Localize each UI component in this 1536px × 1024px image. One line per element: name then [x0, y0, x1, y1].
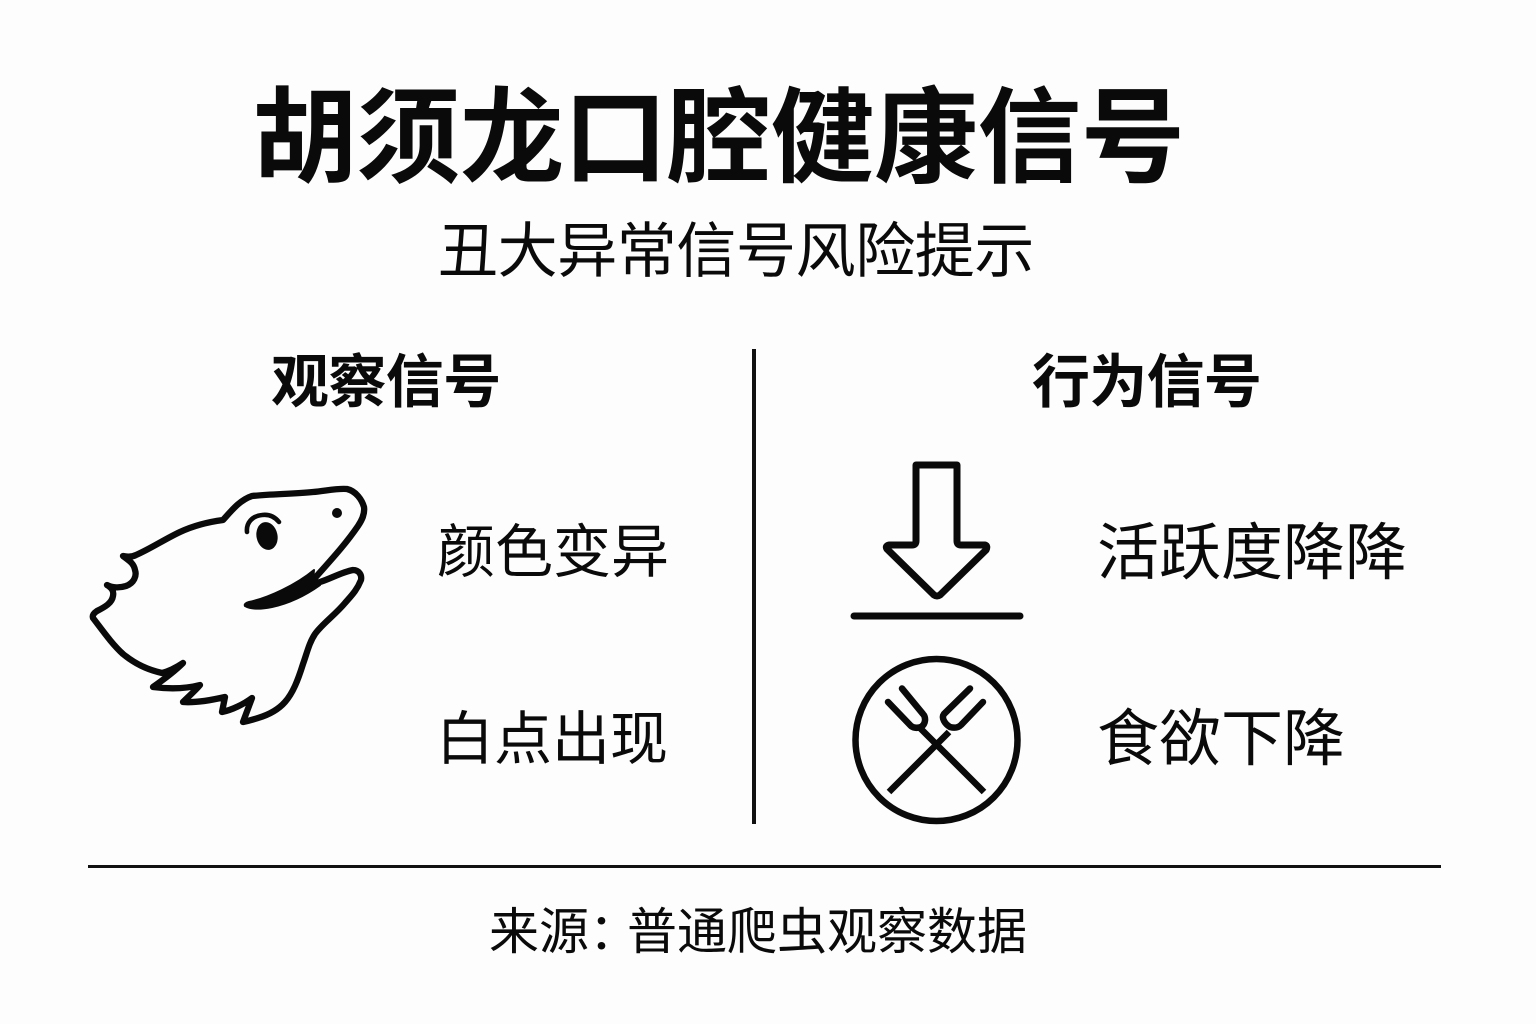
brow — [247, 515, 279, 532]
column divider — [752, 349, 756, 824]
mouth — [245, 570, 320, 609]
title: 胡须龙口腔健康信号 — [253, 81, 1185, 197]
icon: bearded dragon head — [93, 489, 364, 722]
label: activity drop: 活跃度降降 — [1097, 519, 1407, 588]
heading: observation signals: 观察信号 — [271, 350, 501, 415]
label: colour change: 颜色变异 — [437, 520, 669, 585]
footer source: 来源：普通爬虫观察数据 — [489, 904, 1027, 960]
subtitle: 丑大异常信号风险提示 — [438, 218, 1034, 285]
nostril — [332, 508, 342, 518]
icon: down arrow above line — [854, 465, 1020, 616]
icon: crossed forks in circle — [856, 659, 1018, 821]
heading: behaviour signals: 行为信号 — [1032, 350, 1261, 415]
label: white spots: 白点出现 — [436, 707, 668, 772]
eye — [254, 520, 280, 552]
label: appetite drop: 食欲下降 — [1097, 705, 1345, 774]
footer rule — [88, 865, 1441, 868]
